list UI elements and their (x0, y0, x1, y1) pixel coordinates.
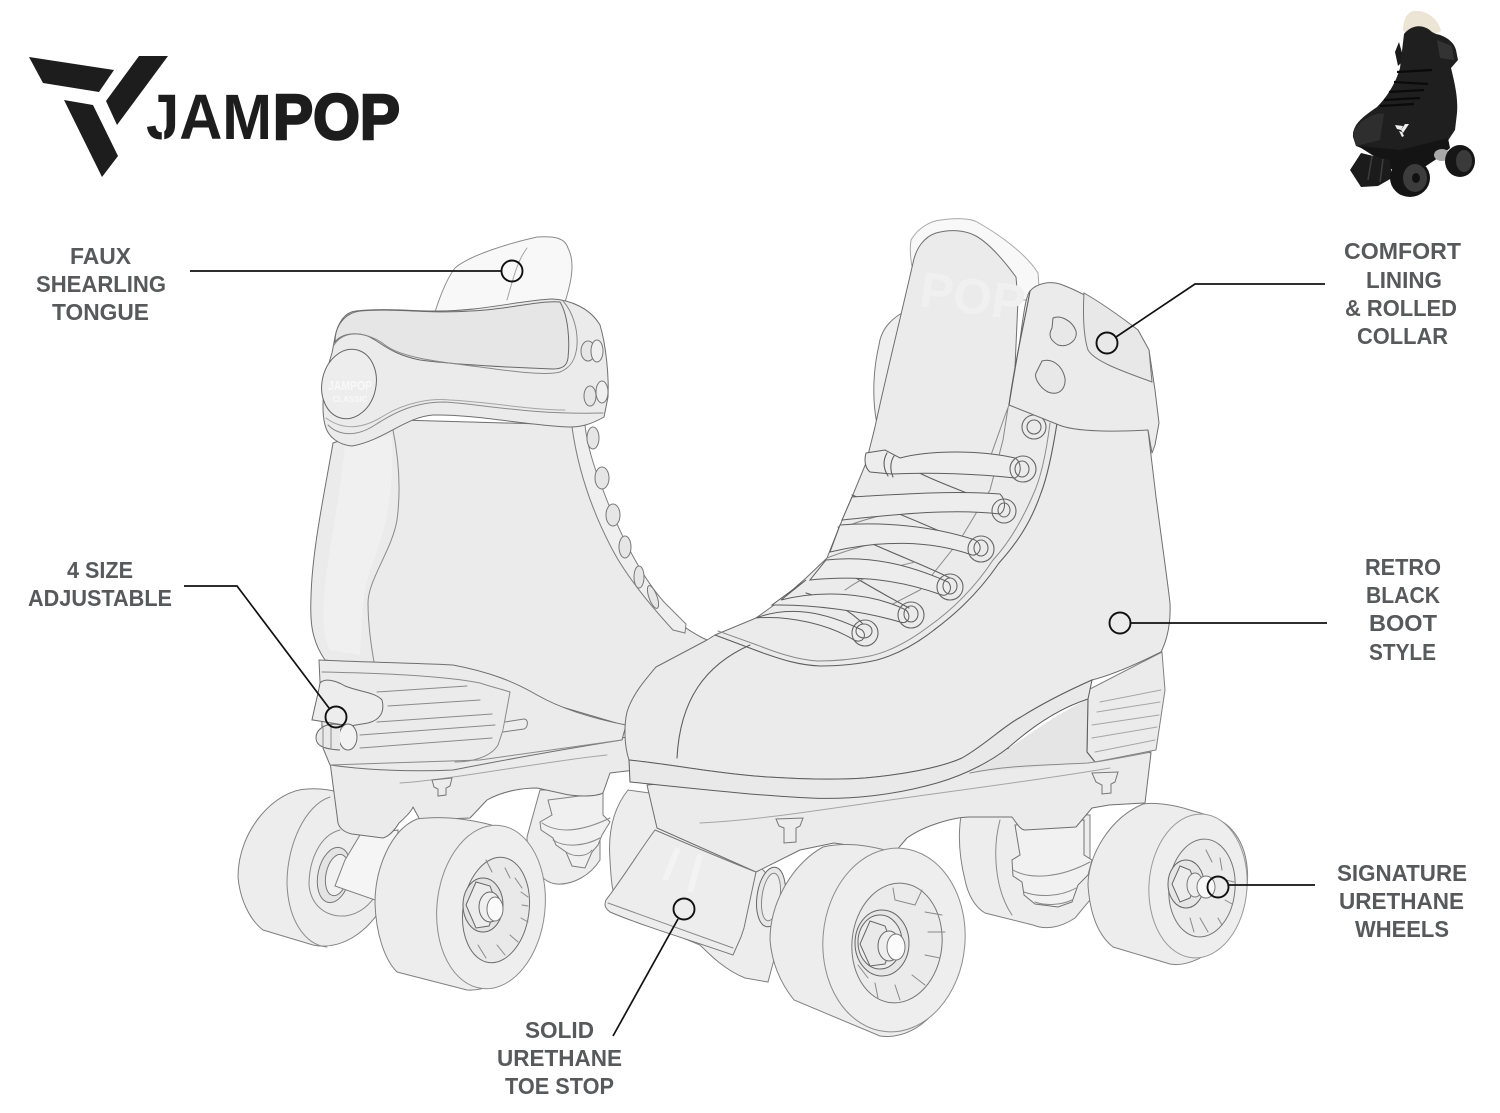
far toe wheel (610, 790, 790, 982)
heel cup (319, 660, 626, 771)
callout: signature urethane wheels: WHEELS (1355, 916, 1449, 942)
callout: faux shearling tongue: TONGUE (52, 299, 149, 325)
callout: signature urethane wheels (1208, 860, 1467, 942)
frame plate (330, 735, 640, 838)
logo: Jampop (29, 56, 400, 177)
tongue (435, 237, 572, 312)
laces (756, 408, 1020, 641)
illustration: right skate (front view) (605, 219, 1252, 1038)
callout: retro black boot style: BLACK (1366, 582, 1440, 608)
bolt (432, 778, 452, 796)
toe stop (605, 830, 756, 955)
illustration: left skate (rear view) (238, 237, 707, 994)
callout: solid urethane toe stop: TOE STOP (505, 1073, 614, 1099)
rolled collar (315, 299, 608, 446)
wheel hub (456, 853, 536, 967)
tongue: POP (916, 261, 1029, 332)
eyelets (852, 415, 1046, 646)
frame plate (647, 740, 1151, 872)
front wheel (770, 842, 973, 1038)
callout: signature urethane wheels: URETHANE (1339, 888, 1464, 914)
callout: solid urethane toe stop (497, 898, 694, 1099)
lining studs (1036, 317, 1076, 393)
size adjuster (312, 680, 383, 750)
front wheel (375, 818, 553, 994)
callout: faux shearling tongue: SHEARLING (36, 271, 166, 297)
product thumbnail: black skate (1350, 11, 1475, 197)
sole band (629, 680, 1092, 798)
wheel hub (1165, 836, 1239, 940)
callout: 4 size adjustable (28, 557, 346, 728)
callout: comfort lining and rolled collar: COLLAR (1357, 323, 1448, 349)
callout: comfort lining and rolled collar: LINING (1366, 267, 1442, 293)
heel block (960, 652, 1165, 780)
rear near wheel (1088, 803, 1252, 965)
callout: 4 size adjustable: 4 SIZE (67, 557, 133, 583)
callout: comfort lining and rolled collar (1096, 238, 1461, 354)
collar badge: CLASSIC (332, 395, 368, 404)
lace eyestay (572, 425, 686, 633)
callout: comfort lining and rolled collar: & ROLLED (1345, 295, 1457, 321)
boot body (625, 405, 1170, 779)
callout: retro black boot style (1110, 554, 1441, 665)
rolled collar (1009, 283, 1159, 453)
callout: 4 size adjustable: ADJUSTABLE (28, 585, 172, 611)
collar studs (581, 340, 608, 406)
rear far wheel (959, 810, 1092, 928)
boot body (311, 420, 707, 730)
rear far wheel (527, 790, 610, 884)
callout: retro black boot style: STYLE (1369, 639, 1436, 665)
callout: retro black boot style: RETRO (1365, 554, 1441, 580)
callout: solid urethane toe stop: URETHANE (497, 1045, 622, 1071)
callout: solid urethane toe stop: SOLID (525, 1017, 594, 1043)
callout: retro black boot style: BOOT (1369, 610, 1437, 636)
logo wordmark (146, 81, 400, 153)
callout: comfort lining and rolled collar: COMFORT (1344, 238, 1461, 264)
plate bolts (776, 772, 1118, 843)
rear near wheel (238, 789, 400, 947)
collar badge: JAMPOP (328, 378, 372, 393)
logo mark (29, 56, 168, 177)
collar badge (315, 344, 383, 424)
eyestay (715, 423, 1057, 666)
wheel hub (846, 879, 948, 1007)
tongue (866, 219, 1040, 480)
callout: faux shearling tongue (36, 243, 522, 325)
logo wordmark: JAM (146, 81, 272, 153)
logo wordmark: POP (273, 81, 400, 153)
callout: signature urethane wheels: SIGNATURE (1337, 860, 1467, 886)
callout: faux shearling tongue: FAUX (70, 243, 132, 269)
toe cap seam (677, 645, 750, 758)
